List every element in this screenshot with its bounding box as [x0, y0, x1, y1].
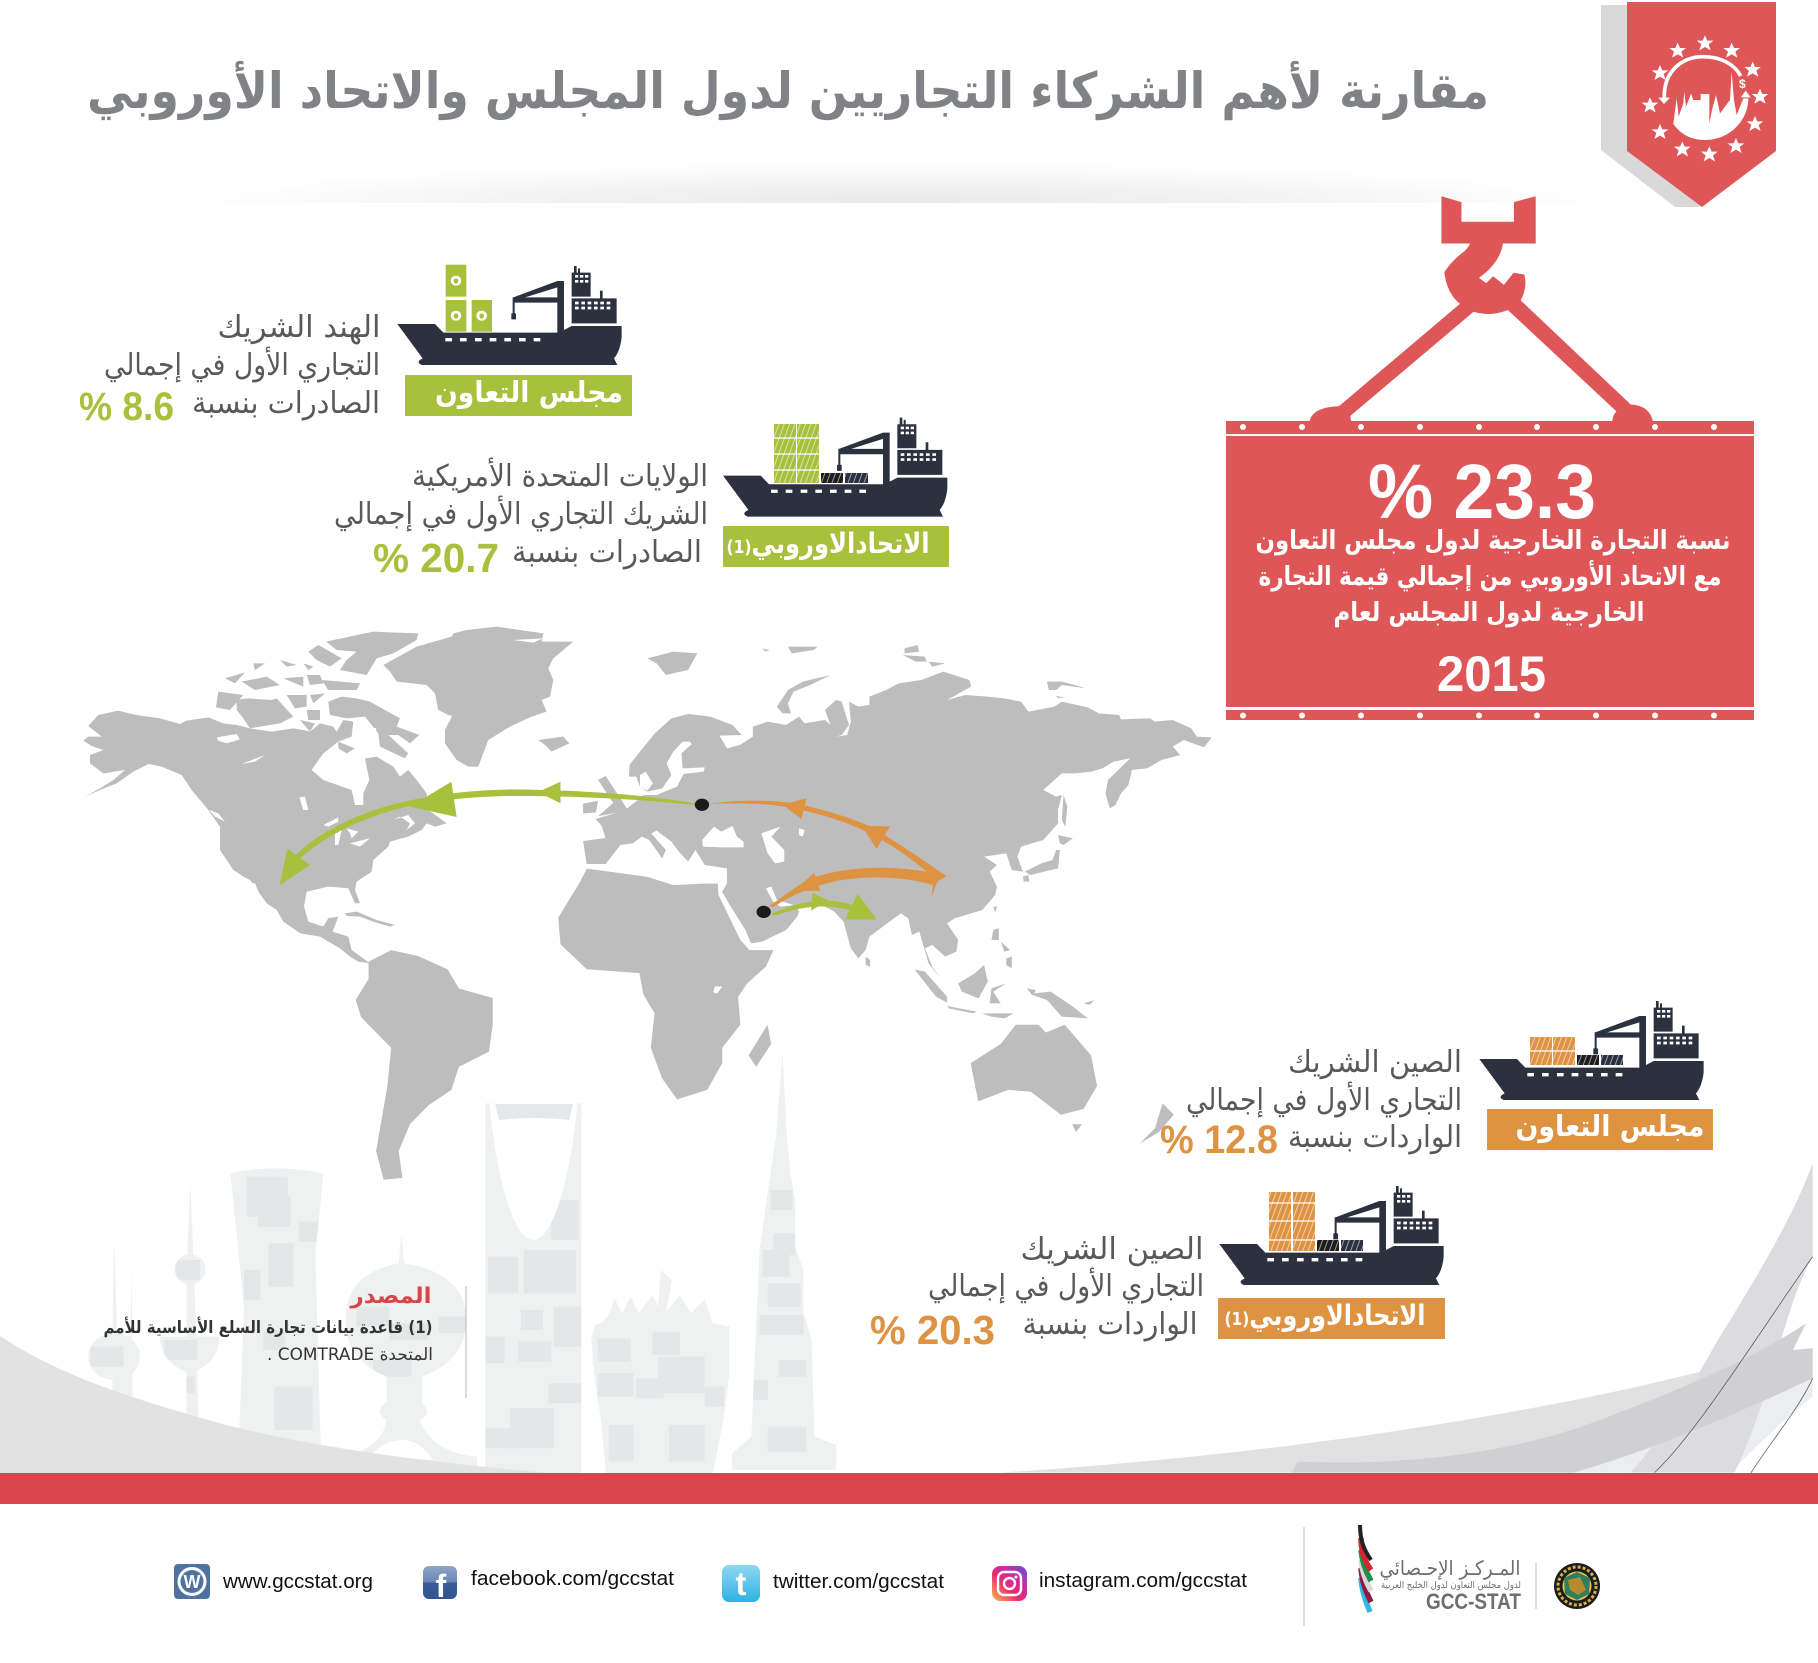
- icon: twitter: [722, 1565, 760, 1602]
- icon: facebook: [423, 1566, 457, 1604]
- background swoosh: bottom left: [0, 1040, 877, 1480]
- value 8.6%: % 8.6: [79, 385, 174, 429]
- icon: facebook: f: [436, 1568, 447, 1604]
- green arrow: EU to USA: [280, 782, 698, 885]
- text: India export partner: [79, 310, 380, 429]
- orange arrow: GCC from China: [769, 868, 947, 907]
- ship: EU imports, orange containers: الاتحادالاوروبي(1): [1224, 1299, 1426, 1332]
- text: India export partner: الهند الشريك: [218, 310, 380, 345]
- containers: [1530, 1037, 1623, 1065]
- GCC-STAT logo: GCC-STAT: [1426, 1589, 1521, 1614]
- footer social links: facebook.com/gccstat: [471, 1568, 674, 1590]
- title underline shadow: [174, 123, 1620, 203]
- source note: المتحدة COMTRADE .: [267, 1345, 433, 1365]
- text: China import partner EU: التجاري الأول في إجمالي: [928, 1266, 1204, 1304]
- icon: ring, skyline and stars: [1642, 35, 1768, 161]
- southern continents: [356, 776, 1174, 1180]
- description: الخارجية لدول المجلس لعام: [1334, 598, 1644, 628]
- text: USA export partner: الشريك التجاري الأول في إجمالي: [334, 494, 708, 532]
- value 20.7%: % 20.7: [373, 535, 499, 581]
- containers: [1269, 1192, 1363, 1251]
- lakes and gulfs: [209, 638, 543, 910]
- icon: instagram: [992, 1566, 1027, 1601]
- icon: wordpress: [174, 1564, 210, 1599]
- text: India export partner: الصادرات بنسبة: [192, 386, 380, 421]
- main curve: [1000, 1348, 1813, 1473]
- text: USA export partner: الولايات المتحدة الأمريكية: [412, 456, 708, 494]
- footer divider: [1303, 1527, 1305, 1626]
- icon: ring, skyline and stars: $: [1739, 77, 1746, 91]
- text: China import partner GCC: الصين الشريك: [1288, 1045, 1462, 1080]
- source note: (1) قاعدة بيانات تجارة السلع الأساسية للأمم: [104, 1317, 432, 1338]
- description: [1256, 526, 1730, 628]
- label: EU green: [723, 526, 949, 567]
- text: China import partner EU: الواردات بنسبة: [1022, 1307, 1198, 1342]
- badge logo: [1601, 2, 1776, 207]
- footer social links: [174, 1564, 1247, 1604]
- value 12.8%: % 12.8: [1160, 1118, 1278, 1162]
- skyline silhouette: [88, 1057, 836, 1473]
- label: GCC orange: [1487, 1109, 1713, 1150]
- title: مقارنة لأهم الشركاء التجاريين لدول المجلس والاتحاد الأوروبي: [87, 60, 1489, 121]
- crane hook: [1309, 196, 1653, 423]
- text: USA export partner: [334, 456, 708, 581]
- source note: [104, 1284, 466, 1398]
- orange arrow: EU from China: [709, 798, 947, 877]
- text: India export partner: التجاري الأول في إجمالي: [104, 345, 380, 383]
- badge shield: [1627, 2, 1776, 207]
- inland seas: [640, 742, 805, 907]
- source note: المصدر: [349, 1284, 432, 1309]
- ship: EU exports, green containers: الاتحادالاوروبي(1): [726, 527, 930, 560]
- icon: wordpress: W: [184, 1572, 200, 1592]
- ship: GCC imports, orange containers: [1479, 1001, 1713, 1150]
- ship: GCC exports, oil barrels: مجلس التعاون: [435, 375, 623, 409]
- vertical band: [1631, 1163, 1813, 1473]
- background swoosh: bottom right: [1000, 1163, 1813, 1473]
- GCC-STAT logo: لدول مجلس التعاون لدول الخليج العربية: [1381, 1580, 1521, 1591]
- icon: twitter: t: [736, 1565, 746, 1602]
- text: China import partner GCC: [1160, 1045, 1462, 1162]
- footer social links: twitter.com/gccstat: [773, 1571, 944, 1593]
- ship: EU exports, green containers: [723, 418, 949, 567]
- light band: [1574, 1378, 1813, 1473]
- ship: GCC imports, orange containers: مجلس التعاون: [1516, 1109, 1704, 1143]
- route arrows on map: [280, 782, 947, 920]
- bottom riveted strip: [1226, 710, 1754, 720]
- description: مع الاتحاد الأوروبي من إجمالي قيمة التجارة: [1258, 560, 1722, 592]
- red footer bar: [0, 1473, 1818, 1504]
- green arrow: GCC to India: [771, 893, 877, 920]
- dark overlap: [1292, 1323, 1813, 1473]
- label: GCC green: [405, 375, 632, 416]
- ship: GCC exports, oil barrels: [397, 265, 632, 416]
- GCC-STAT logo: [1360, 1525, 1600, 1614]
- text: China import partner EU: الصين الشريك: [1020, 1232, 1204, 1267]
- badge shadow: [1601, 5, 1700, 207]
- footer social links: instagram.com/gccstat: [1039, 1570, 1247, 1592]
- origin dots: [695, 799, 771, 918]
- barrels: [446, 265, 492, 332]
- footer social links: www.gccstat.org: [222, 1571, 373, 1593]
- text: China import partner EU: [870, 1232, 1204, 1353]
- top riveted strip: [1226, 421, 1754, 434]
- text: China import partner GCC: الواردات بنسبة: [1288, 1120, 1462, 1155]
- North America and Greenland: [83, 627, 573, 963]
- year: 2015: [1437, 646, 1546, 702]
- world map: [83, 627, 1212, 1180]
- text: China import partner GCC: التجاري الأول في إجمالي: [1186, 1080, 1462, 1118]
- white arch cut: [370, 1440, 433, 1460]
- label: EU orange: [1218, 1298, 1445, 1339]
- containers: [774, 424, 868, 483]
- text: USA export partner: الصادرات بنسبة: [512, 535, 702, 570]
- logo text: المـركـز الإحـصائي: [1380, 1556, 1520, 1581]
- Eurasia: [583, 645, 1212, 1018]
- big number: % 23.3: [1368, 449, 1596, 535]
- ship: EU imports, orange containers: [1218, 1186, 1445, 1339]
- value 20.3%: % 20.3: [870, 1307, 995, 1353]
- description: نسبة التجارة الخارجية لدول مجلس التعاون: [1256, 526, 1730, 556]
- logo stripes: [1360, 1525, 1371, 1612]
- emblem: [1554, 1563, 1600, 1609]
- panel: 23.3% share: [1226, 421, 1754, 720]
- left swoosh: [0, 1336, 560, 1474]
